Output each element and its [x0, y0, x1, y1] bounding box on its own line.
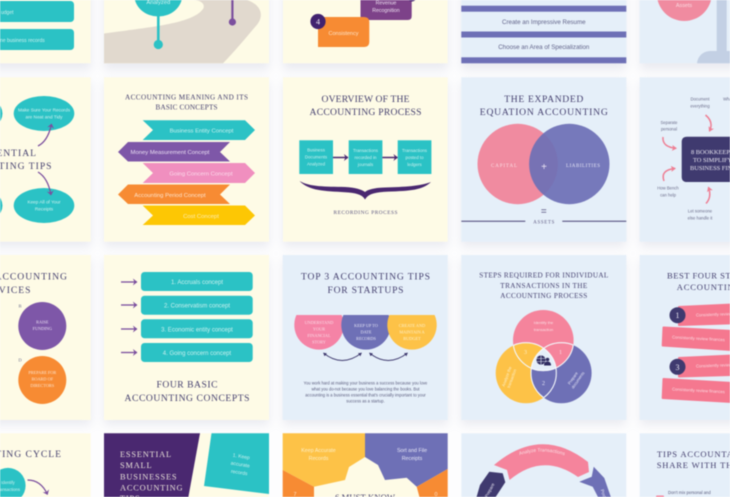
arrow: cost: Cost Concept [183, 214, 219, 220]
teal tip block: 1. Keep [232, 453, 250, 461]
panel: overview of the accounting process [283, 77, 448, 242]
circle: identify transactions: Identify [1, 480, 16, 485]
bar: business records: ne business records [0, 38, 45, 44]
venn labels: Prepare [567, 370, 579, 385]
title: TOP 3 ACCOUNTING TIPS [301, 272, 430, 282]
icon: tip marker [656, 496, 664, 497]
title: SMALL [120, 461, 152, 470]
orange corners [283, 469, 448, 497]
step: ledgers: posted to [405, 155, 424, 160]
road [104, 0, 261, 63]
arrow: money measurement [118, 142, 230, 162]
circle: raise funding [18, 302, 66, 350]
step: journals [349, 140, 382, 174]
left ellipses [0, 96, 2, 222]
circle: identify transactions [0, 468, 26, 497]
panel: accounting meaning [104, 77, 269, 242]
title [301, 272, 430, 296]
venn labels: Analyze the [501, 365, 513, 387]
segment: purple [579, 467, 612, 497]
venn labels: transaction [506, 368, 517, 389]
title [124, 380, 250, 404]
brace [300, 181, 431, 200]
arc: left [324, 353, 362, 360]
tip: neat records [14, 96, 74, 131]
assets line and label: ASSETS [533, 220, 555, 226]
text: resume: Create an Impressive Resume [502, 19, 586, 26]
text: keep accurate records: Keep Accurate [301, 448, 336, 454]
circle: raise funding: B [18, 304, 22, 308]
tip: understand: YOUR [313, 326, 325, 332]
tip: neat records: are Neat and Tidy [25, 114, 63, 120]
panel: accounting services [0, 255, 91, 420]
bar: economic entity: 3. Economic entity concept [161, 327, 233, 333]
arrow: money measurement: Money Measurement Concept [131, 150, 210, 156]
teal tip block [204, 433, 269, 494]
venn numbers [524, 350, 562, 387]
paragraph: accounting is a business essential that's crucially important to your [305, 392, 426, 398]
tip: budget: MAINTAIN A [399, 330, 426, 334]
circle: prepare for board: D [18, 358, 22, 362]
tip text: Don't mix personal and [668, 490, 711, 495]
panel: accounting cycle [0, 433, 91, 497]
arrow: business entity: Business Entity Concept [170, 128, 234, 134]
panel: four basic accounting concepts [104, 255, 269, 420]
text: keep accurate records: Records [309, 456, 329, 462]
circle: raise funding: FUNDING [33, 326, 52, 331]
bar 2 [663, 328, 730, 350]
title: ACCOUNTING PROCESS [310, 107, 422, 118]
panel: top 3 accounting tips [283, 255, 448, 420]
panel: assets scale [640, 0, 730, 63]
title [0, 148, 52, 172]
equals sign: = [541, 206, 547, 218]
badge: 4 [310, 14, 326, 29]
circle: prepare for board: PREPARE FOR [28, 370, 56, 375]
panel: essential small businesses [104, 433, 269, 497]
arrow: accounting period [118, 184, 230, 204]
title: TRANSACTIONS IN THE [500, 282, 588, 290]
badge: 3: 3 [676, 363, 680, 372]
tip: understand: STORY [312, 340, 326, 344]
arrow: going concern [143, 163, 255, 183]
step: documents: Analyzed [307, 162, 326, 166]
panel: best four steps [640, 255, 730, 420]
text: sort and file [397, 448, 427, 462]
title: FOR STARTUPS [328, 285, 404, 296]
arrow [28, 480, 48, 494]
box: revenue recognition [360, 0, 416, 20]
circle: assets: Assets [676, 3, 692, 9]
step: documents: Documents [305, 154, 328, 160]
venn: capital [478, 124, 558, 204]
bar: going concern: 4. Going concern concept [163, 351, 232, 357]
panel: 8 bookkeeping tips [640, 77, 730, 242]
paragraph: success as a startup. [346, 398, 385, 404]
bar: accruals: 1. Accruals concept [171, 280, 223, 286]
tip: records [341, 315, 391, 350]
title: ESSENTIAL [120, 450, 172, 459]
label: recording process: RECORDING PROCESS [334, 210, 398, 216]
arc: right [370, 353, 408, 360]
panel: accounting cycle ring [461, 433, 626, 497]
labels: everything [690, 104, 710, 108]
panel: career bars [461, 0, 626, 63]
venn numbers: 3 [524, 350, 527, 356]
labels: personal [661, 126, 677, 132]
arrow: going concern: Going Concern Concept [169, 172, 233, 178]
badge: 1: 1 [676, 311, 680, 320]
step: ledgers: ledgers [407, 162, 423, 167]
labels: can help [660, 192, 677, 198]
paragraph: what you do-not because you love balancing the books. But [311, 386, 420, 392]
arrow: down [38, 172, 51, 195]
box: revenue recognition: Recognition [372, 8, 400, 14]
tip: records: KEEP UP TO [354, 323, 378, 328]
bar: economic entity [141, 319, 253, 338]
venn diagram [496, 310, 592, 403]
step: ledgers [398, 140, 431, 174]
title: ACCOUNTING [120, 484, 183, 492]
arrow: from document [706, 115, 711, 131]
labels: else handle it [688, 216, 713, 220]
panel: accounting principles [283, 0, 448, 63]
labels: Document [690, 96, 710, 102]
text: sort and file: Receipts [402, 456, 423, 462]
arrow: from someone [706, 188, 710, 204]
step: documents: Business [307, 148, 326, 152]
bar 2: Consistently review finances [672, 335, 725, 342]
plus sign: + [541, 162, 547, 173]
step: documents [299, 140, 333, 174]
text: keep accurate records [301, 448, 336, 462]
arrow: step 2 to 3 [382, 156, 398, 158]
bar: conservatism: 2. Conservatism concept [164, 304, 230, 310]
tip: records: DATE [361, 330, 372, 334]
title [480, 94, 608, 118]
badge: 1 [670, 307, 686, 323]
marker: analyzed: Analyzed [146, 0, 170, 6]
panel: budget and business records card [0, 0, 91, 63]
tip: budget [387, 315, 437, 350]
venn: liabilities [529, 124, 610, 204]
tip: understand: FINANCIAL [307, 333, 331, 338]
tip: understand [294, 315, 344, 350]
segment: analyze transactions: Analyze Transactions [519, 448, 565, 456]
panel: winding road timeline [104, 0, 269, 63]
venn numbers: 1 [559, 350, 562, 356]
icon: globe and person [536, 355, 551, 366]
tip: understand: UNDERSTAND [305, 320, 333, 325]
title: ACCOUNTING CONCEPTS [124, 393, 250, 404]
panel: expanded equation [461, 77, 626, 242]
marker: purple pin [229, 0, 236, 26]
labels [657, 96, 730, 220]
labels: How Bench [657, 186, 679, 190]
arrow: step 1 to 2 [333, 156, 348, 158]
labels: Let someone [688, 208, 713, 214]
arrow: up [38, 124, 52, 146]
tip: neat records: Make Sure Your Records [18, 108, 71, 112]
tip: keep receipts: Keep All of Your [27, 200, 61, 204]
purple block [365, 433, 448, 487]
step: journals: recorded in [355, 155, 377, 160]
step: ledgers: Transactions [402, 148, 428, 153]
teal tip block: accurate [230, 461, 250, 470]
title [667, 270, 730, 292]
badge: 3 [670, 359, 686, 375]
venn: liabilities: LIABILITIES [566, 164, 600, 169]
badge: 4: 4 [316, 18, 320, 26]
bar 3 [679, 356, 730, 376]
title: OVERVIEW OF THE [322, 94, 410, 105]
circle: prepare for board [18, 356, 66, 404]
bar: going concern [141, 343, 253, 362]
title: THE EXPANDED [504, 94, 583, 105]
title [657, 449, 730, 470]
venn numbers: 2 [542, 381, 545, 387]
teal tip block: records [230, 469, 248, 477]
title [125, 94, 248, 112]
box: revenue recognition: Revenue [376, 0, 396, 6]
paragraph [304, 380, 428, 404]
segment: navy [476, 472, 505, 497]
box: consistency: Consistency [329, 31, 359, 37]
paragraph: You work hard at making your business a success because you love [304, 380, 428, 386]
panel: essential accounting tips [0, 77, 91, 242]
venn labels: Identify the [534, 320, 554, 325]
text: sort and file: Sort and File [397, 448, 427, 454]
title: ACCOUNTING PROCESS [500, 292, 587, 300]
tip: records: RECORDS [356, 336, 377, 341]
labels: Separate [660, 120, 678, 125]
purple block [104, 433, 200, 497]
marker: analyzed [134, 0, 182, 49]
panel: 6 must know [283, 433, 448, 497]
venn labels: documents [570, 371, 585, 390]
yellow block [283, 433, 365, 487]
title: EQUATION ACCOUNTING [480, 107, 608, 118]
circle: prepare for board: DIRECTORS [30, 383, 55, 388]
circle: raise funding: RAISE [36, 320, 49, 324]
title [310, 94, 422, 118]
bar: accruals [141, 272, 253, 291]
tip: budget: CREATE AND [399, 323, 425, 328]
arrow: business entity [143, 120, 255, 140]
arrow: from bench [663, 168, 675, 181]
circle: prepare for board: BOARD OF [31, 376, 54, 382]
bar 4: Consistently review finances [672, 387, 725, 394]
text: specialization: Choose an Area of Specialization [498, 44, 590, 51]
venn labels: transaction [534, 327, 553, 332]
bar 1 [679, 304, 730, 325]
segment: analyze transactions [494, 444, 590, 480]
tip: keep receipts: Receipts [35, 206, 54, 212]
title [0, 272, 68, 296]
panel: tips accountants share [640, 433, 730, 497]
bar 4 [663, 379, 730, 402]
title: FOUR BASIC [156, 380, 218, 390]
arrow: cost [143, 206, 255, 225]
venn labels [501, 320, 585, 390]
tip: keep receipts [14, 188, 74, 223]
title: STEPS REQUIRED FOR INDIVIDUAL [479, 272, 608, 280]
arrows [121, 282, 137, 352]
bar: conservatism [141, 296, 253, 315]
panel: steps required [461, 255, 626, 420]
arrow: from separate [663, 137, 676, 148]
corner numbers [294, 492, 438, 497]
scale stand [697, 0, 730, 63]
tip: budget: BUDGET [403, 336, 421, 341]
arrow: accounting period: Accounting Period Concept [134, 193, 206, 199]
title [120, 450, 183, 497]
step: journals: Transactions [353, 148, 379, 153]
bar: budget: udget [1, 10, 14, 16]
box: heading [682, 137, 730, 182]
box: consistency [318, 17, 369, 47]
venn: capital: CAPITAL [491, 164, 517, 169]
title: BUSINESSES [120, 472, 177, 482]
title: ACCOUNTING MEANING AND ITS [125, 94, 248, 102]
step: journals: journals [357, 162, 374, 167]
title [479, 272, 608, 300]
title: BASIC CONCEPTS [156, 104, 218, 112]
